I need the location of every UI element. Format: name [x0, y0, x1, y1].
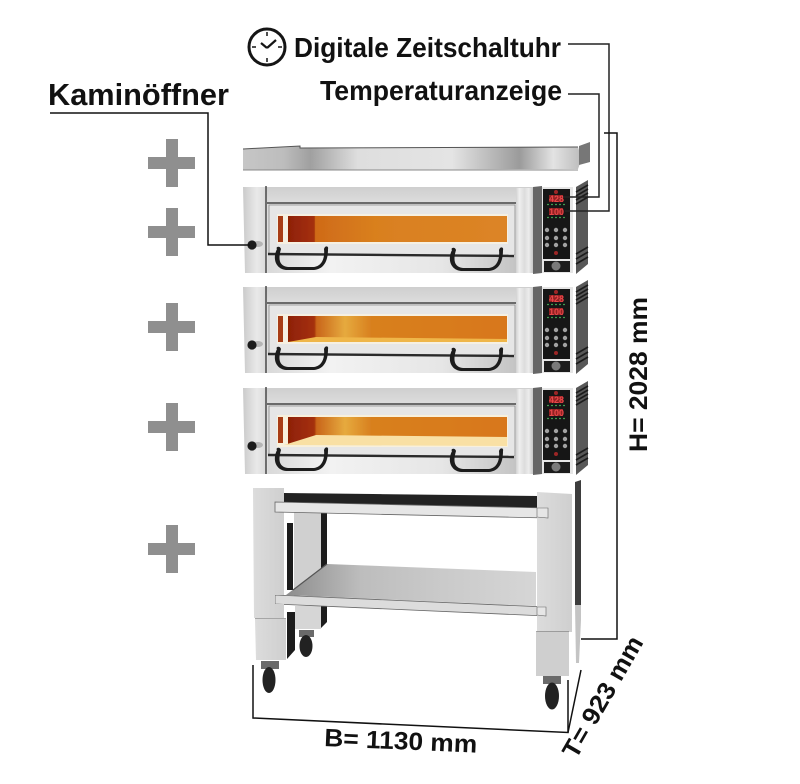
label: Temperaturanzeige: Temperaturanzeige	[320, 75, 562, 106]
oven window 3	[277, 415, 508, 447]
dimension line: height	[581, 133, 617, 639]
caster front right	[543, 676, 561, 710]
caster front left	[261, 661, 279, 693]
icon: plus, chimney opener option	[148, 139, 195, 187]
leader line: Temperaturanzeige	[563, 94, 599, 197]
oven hood cover	[243, 142, 590, 170]
heading: Kaminöffner: Kaminöffner	[48, 77, 229, 112]
rear dark band	[284, 493, 538, 508]
rear leg	[287, 512, 327, 659]
label: Digitale Zeitschaltuhr: Digitale Zeitschaltuhr	[294, 32, 561, 63]
oven deck 3	[243, 381, 588, 475]
right leg	[537, 492, 572, 632]
icon: plus, deck one option	[148, 208, 195, 256]
dimension line: depth	[568, 670, 581, 732]
left leg	[253, 488, 284, 618]
lower shelf	[286, 564, 536, 606]
icon: clock	[249, 29, 285, 65]
icon: plus, stand option	[148, 525, 195, 573]
oven window 2	[277, 314, 508, 344]
dimension line: width	[253, 665, 568, 732]
oven window 1	[277, 214, 508, 244]
dimension label: width: B= 1130 mm	[324, 724, 478, 759]
oven deck 2	[243, 280, 588, 374]
dimension label: height: H= 2028 mm	[625, 297, 653, 452]
icon: plus, deck three option	[148, 403, 195, 451]
stand	[253, 480, 581, 710]
leader line: Kaminöffner	[50, 113, 250, 245]
top shelf rail	[275, 502, 548, 518]
oven deck 1	[243, 180, 588, 274]
icon: plus, deck two option	[148, 303, 195, 351]
caster rear	[299, 630, 314, 657]
right rail ends	[537, 508, 548, 616]
dimension label: depth: T= 923 mm	[557, 631, 649, 763]
leader line: Digitale Zeitschaltuhr	[565, 44, 609, 211]
